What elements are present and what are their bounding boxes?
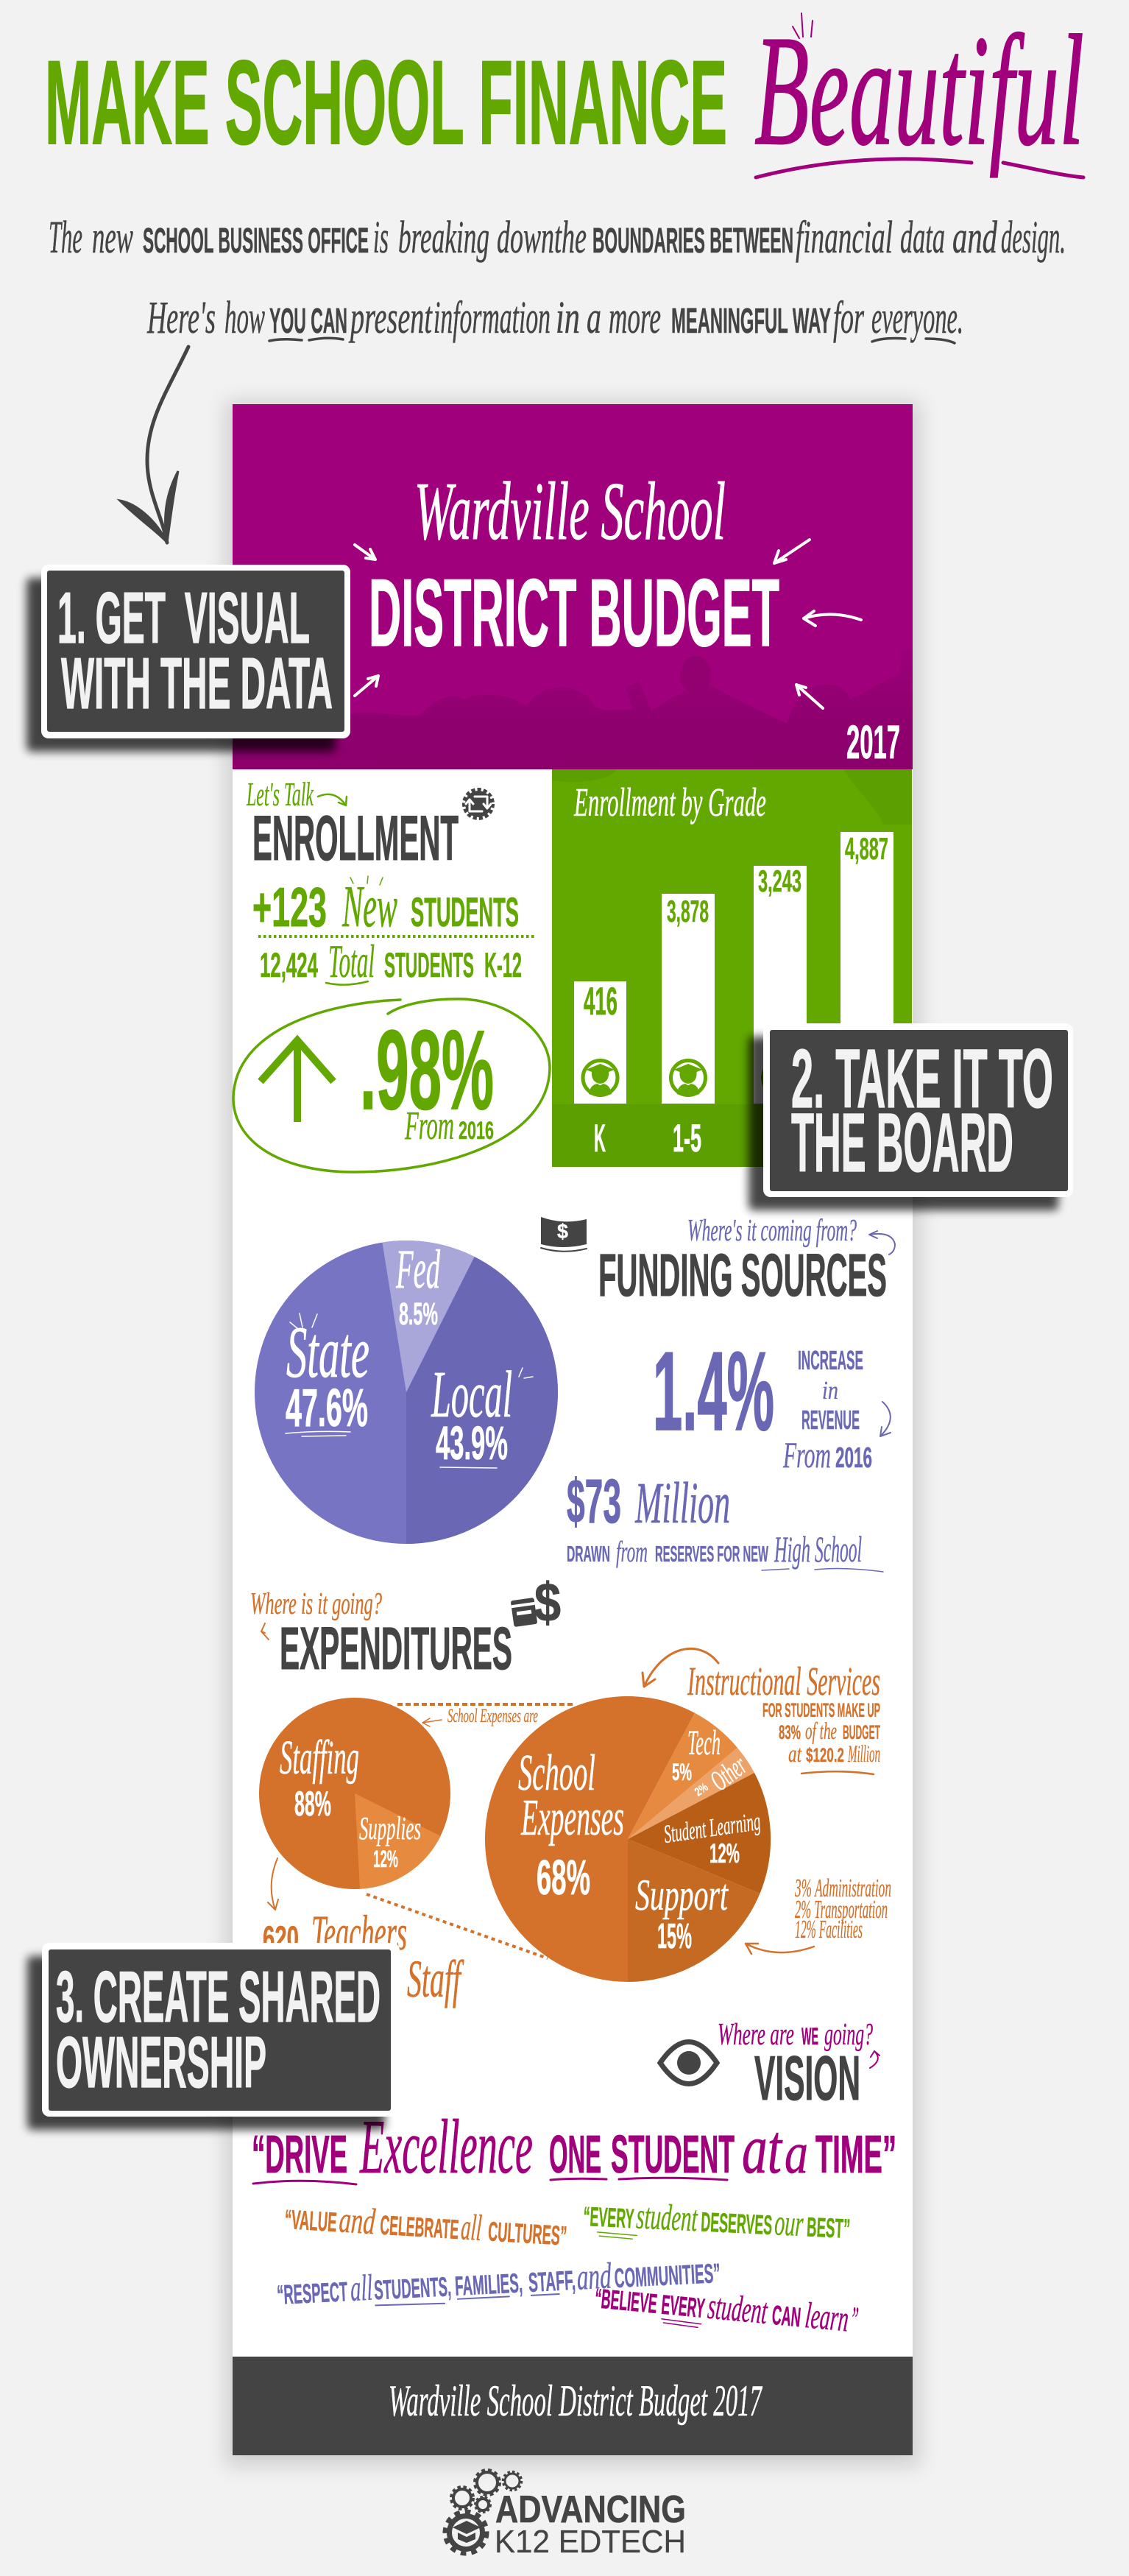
intro text line 2: in — [556, 293, 580, 343]
arrow: support — [746, 1944, 814, 1954]
value: every student: student — [635, 2195, 699, 2239]
revenue stat: From — [782, 1434, 831, 1475]
logo: advancing k12 edtech — [445, 2470, 686, 2560]
icon: card and dollar: $ — [534, 1572, 561, 1633]
value: cultures: CELEBRATE — [379, 2210, 460, 2245]
value: cultures: and — [338, 2198, 377, 2242]
intro text line 2: a — [587, 293, 601, 343]
callout: create shared ownership — [27, 1943, 400, 2130]
graduate head shape — [680, 656, 711, 694]
vision subheading: WE — [801, 2023, 818, 2050]
reserves stat: Million — [634, 1472, 730, 1536]
value: respect: STUDENTS, — [373, 2271, 452, 2305]
lets talk heading: Let's Talk — [246, 775, 314, 813]
growth callout oval — [233, 999, 550, 1172]
instructional services note: Instructional Services — [687, 1659, 880, 1704]
arrow: staffing — [268, 1858, 278, 1910]
reserves stat: DRAWN — [567, 1541, 610, 1567]
staff counts — [263, 1905, 464, 2008]
bar: 6-8: 3,243 — [758, 864, 801, 898]
growth stat — [360, 1007, 494, 1148]
icon: eye — [660, 2042, 717, 2083]
total students stat: STUDENTS — [384, 945, 474, 984]
growth stat: From — [404, 1103, 454, 1148]
value: respect: and — [576, 2254, 613, 2298]
panel: vision: ” — [848, 2298, 860, 2340]
dashed connector top — [397, 1703, 573, 1706]
pie chart: total budget — [485, 1696, 771, 1982]
value: respect — [276, 2249, 721, 2312]
revenue stat: 1.4% — [653, 1329, 774, 1454]
icon: money flag — [541, 1217, 587, 1252]
intro text line 2: for — [833, 293, 865, 343]
intro text line 1 — [49, 213, 1066, 263]
value: respect: FAMILIES, — [454, 2268, 523, 2301]
value: believe: “BELIEVE — [593, 2283, 659, 2319]
value: cultures: all — [460, 2206, 483, 2248]
panel: header — [233, 404, 913, 769]
intro text line 2: everyone. — [871, 293, 963, 343]
main slogan: “DRIVE — [252, 2125, 347, 2184]
intro text line 2: present — [349, 293, 433, 343]
staff counts: Teachers — [311, 1905, 407, 1961]
intro text line 1: down — [497, 213, 554, 263]
arrow: lets talk — [318, 794, 347, 805]
callout: take it to the board — [748, 1023, 1073, 1210]
intro text line 1: and — [952, 213, 998, 263]
instructional services note: 83% — [779, 1721, 801, 1743]
pie chart: total budget: School — [518, 1745, 595, 1802]
school expenses note: School Expenses are — [447, 1705, 538, 1726]
pie chart: total budget: Other — [704, 1748, 753, 1797]
reserves stat: RESERVES FOR NEW — [655, 1541, 768, 1567]
value: cultures: “VALUE — [284, 2204, 338, 2237]
intro text line 1: financial — [796, 213, 893, 263]
pie chart: school expenses — [259, 1698, 450, 1889]
pie chart: funding: 47.6% — [286, 1379, 368, 1438]
value: cultures: CULTURES” — [487, 2216, 567, 2251]
intro text line 1: is — [373, 213, 389, 263]
instructional services note — [687, 1659, 880, 1774]
pie chart: total budget: 12% — [709, 1838, 740, 1869]
panel: enrollment summary: ENROLLMENT — [252, 803, 459, 874]
panel: footer — [233, 2357, 913, 2455]
total students stat: 12,424 — [260, 945, 318, 984]
intro text line 1: SCHOOL BUSINESS OFFICE — [143, 222, 369, 261]
pie chart: funding — [255, 1239, 558, 1544]
vision subheading: Where are — [718, 2018, 794, 2052]
funding subheading: Where's it coming from? — [687, 1214, 857, 1248]
panel: vision — [252, 2018, 896, 2343]
value: respect: “RESPECT — [276, 2276, 348, 2310]
value: believe — [593, 2274, 860, 2343]
main slogan: a — [785, 2121, 808, 2186]
vision subheading: going? — [824, 2018, 873, 2052]
intro text line 1: the — [554, 213, 587, 263]
staff counts: Staff — [407, 1949, 464, 2008]
value: respect: COMMUNITIES” — [614, 2258, 721, 2293]
pie chart: funding: State — [286, 1311, 369, 1393]
bar: K: 416 — [584, 980, 617, 1023]
growth stat: .98% — [360, 1007, 494, 1133]
panel: expenditures: EXPENDITURES — [280, 1615, 512, 1682]
intro text line 1: data — [900, 213, 945, 263]
main slogan: STUDENT — [611, 2125, 735, 2184]
new students stat — [252, 875, 519, 939]
panel: enrollment by grade chart — [552, 769, 912, 1167]
revenue stat: in — [822, 1376, 838, 1405]
value: every student — [582, 2192, 852, 2249]
revenue stat: REVENUE — [801, 1405, 860, 1435]
expenditures subheading: Where is it going? — [250, 1587, 382, 1621]
callout: create shared ownership: OWNERSHIP — [56, 2022, 266, 2103]
panel: enrollment summary — [233, 775, 550, 1172]
header year: 2017 — [846, 716, 900, 769]
intro text line 2: more — [609, 293, 661, 343]
icon: money flag: $ — [557, 1220, 568, 1243]
icon: card and dollar — [511, 1572, 561, 1633]
value: respect: STAFF, — [528, 2265, 576, 2298]
intro text line 2: information — [433, 293, 551, 343]
total students stat: K-12 — [484, 945, 522, 984]
value: every student: “EVERY — [583, 2201, 635, 2234]
panel: expenditures: Million — [848, 1741, 880, 1768]
intro text line 1: design. — [1001, 213, 1066, 263]
instructional services note: of the — [805, 1718, 837, 1745]
intro text line 1: breaking — [398, 213, 489, 263]
pie chart: total budget: 68% — [537, 1850, 590, 1905]
value: believe: CAN — [771, 2300, 802, 2332]
value: every student: DESERVES — [700, 2207, 773, 2240]
infographic canvas: 3. CREATE SHARED — [56, 1956, 381, 2037]
arrow: pointing to header — [120, 347, 188, 543]
reserves stat: School — [815, 1528, 862, 1570]
intro text line 2: MEANINGFUL WAY — [671, 302, 831, 341]
reserves stat — [567, 1467, 883, 1572]
reserves stat: High — [774, 1528, 810, 1570]
revenue stat: INCREASE — [798, 1345, 863, 1375]
main panel — [225, 401, 920, 2466]
main slogan: Excellence — [359, 2103, 533, 2189]
revenue stat: 2016 — [835, 1442, 872, 1474]
arrow: school expenses note — [422, 1718, 442, 1726]
support breakdown: 12% Facilities — [795, 1915, 863, 1944]
pie chart: school expenses: Staffing — [280, 1731, 359, 1785]
value: every student: our — [774, 2201, 804, 2244]
pie chart: funding: 43.9% — [436, 1416, 508, 1469]
main slogan: at — [742, 2110, 783, 2188]
instructional services note: $120.2 — [806, 1744, 844, 1766]
value: believe: student — [706, 2285, 770, 2332]
bar: 1-5: 3,878 — [667, 894, 709, 928]
pie chart: funding: Local — [431, 1358, 512, 1431]
main slogan: ONE — [549, 2125, 601, 2184]
panel: expenditures: BUDGET — [843, 1721, 880, 1743]
bar: K — [574, 980, 626, 1104]
pie chart: total budget: 2% — [693, 1781, 711, 1799]
main slogan — [252, 2103, 896, 2189]
new students stat: New — [341, 875, 397, 939]
pie chart: total budget: Support — [635, 1871, 729, 1919]
intro text line 2 — [146, 293, 963, 343]
intro text line 1: BOUNDARIES BETWEEN — [592, 222, 793, 261]
header arrows — [355, 540, 861, 708]
panel: expenditures: FOR STUDENTS MAKE UP — [762, 1699, 880, 1721]
pie chart: school expenses: Supplies — [359, 1810, 421, 1846]
bar: 9-12: 4,887 — [845, 831, 888, 866]
arrow: expenditures — [261, 1623, 269, 1640]
callout: get visual — [26, 565, 350, 752]
panel: funding sources — [255, 1214, 895, 1572]
pie chart: total budget: 5% — [672, 1759, 692, 1785]
pie chart: funding: Fed — [395, 1239, 440, 1300]
reserves stat: $73 — [567, 1467, 621, 1536]
support breakdown — [795, 1874, 891, 1944]
logo: advancing k12 edtech: K12 EDTECH — [495, 2524, 686, 2560]
pie chart: funding: 8.5% — [399, 1296, 438, 1332]
instructional services note: at — [788, 1741, 802, 1768]
intro text line 2: YOU CAN — [269, 302, 347, 341]
arrow: up — [261, 1040, 333, 1122]
dashed connector bottom — [367, 1894, 548, 1958]
crowd silhouette — [233, 648, 913, 769]
intro text line 2: Here's — [146, 293, 216, 343]
bar: 1-5 — [662, 894, 715, 1104]
bar: 9-12 — [840, 831, 893, 1104]
value: cultures — [283, 2195, 568, 2254]
reserves stat: from — [616, 1535, 648, 1568]
infographic canvas: 3% Administration — [795, 1874, 891, 1902]
arrow: funding — [869, 1231, 895, 1255]
pie chart: total budget: Student Learning — [662, 1807, 762, 1849]
arrow: instructional — [643, 1648, 718, 1687]
new students stat: +123 — [252, 876, 327, 938]
panel: footer: Wardville School District Budget 2017 — [389, 2376, 763, 2425]
header script title: Wardville School — [414, 466, 726, 557]
total students stat: Total — [328, 935, 375, 987]
pie chart: total budget: Tech — [687, 1723, 721, 1762]
axis label 1-5: 1-5 — [673, 1117, 701, 1160]
value: every student: BEST” — [806, 2212, 851, 2244]
panel: expenditures — [250, 1572, 891, 2008]
growth stat: 2016 — [459, 1117, 494, 1145]
bar: 6-8 — [754, 864, 807, 1104]
dotted divider — [258, 935, 537, 938]
pie chart: total budget: Expenses — [520, 1790, 624, 1846]
arrow: vision — [870, 2051, 880, 2068]
infographic canvas: 2% Transportation — [795, 1895, 888, 1924]
intro text line 1: The — [49, 213, 82, 263]
intro text line 2: how — [224, 293, 265, 343]
callout: get visual: WITH THE DATA — [61, 643, 333, 724]
main slogan: TIME” — [815, 2125, 896, 2184]
value: believe: learn — [804, 2294, 851, 2340]
value: respect: all — [350, 2267, 373, 2309]
icon: badge — [464, 790, 492, 818]
callout: get visual: 1. GET VISUAL — [57, 577, 310, 658]
pie chart: total budget: 15% — [657, 1917, 692, 1956]
pie chart: school expenses: 12% — [373, 1846, 398, 1872]
logo: advancing k12 edtech: ADVANCING — [495, 2488, 686, 2531]
intro text line 1: new — [92, 213, 133, 263]
value: believe: EVERY — [660, 2290, 707, 2323]
chart title: Enrollment by Grade — [573, 780, 766, 825]
panel: enrollment summary: STUDENTS — [411, 889, 519, 935]
staff counts: 620 — [263, 1919, 299, 1957]
total students stat — [260, 935, 522, 987]
pie chart: school expenses: 88% — [294, 1784, 331, 1823]
panel: vision: VISION — [754, 2044, 860, 2114]
panel: enrollment by grade chart: K — [594, 1117, 606, 1160]
